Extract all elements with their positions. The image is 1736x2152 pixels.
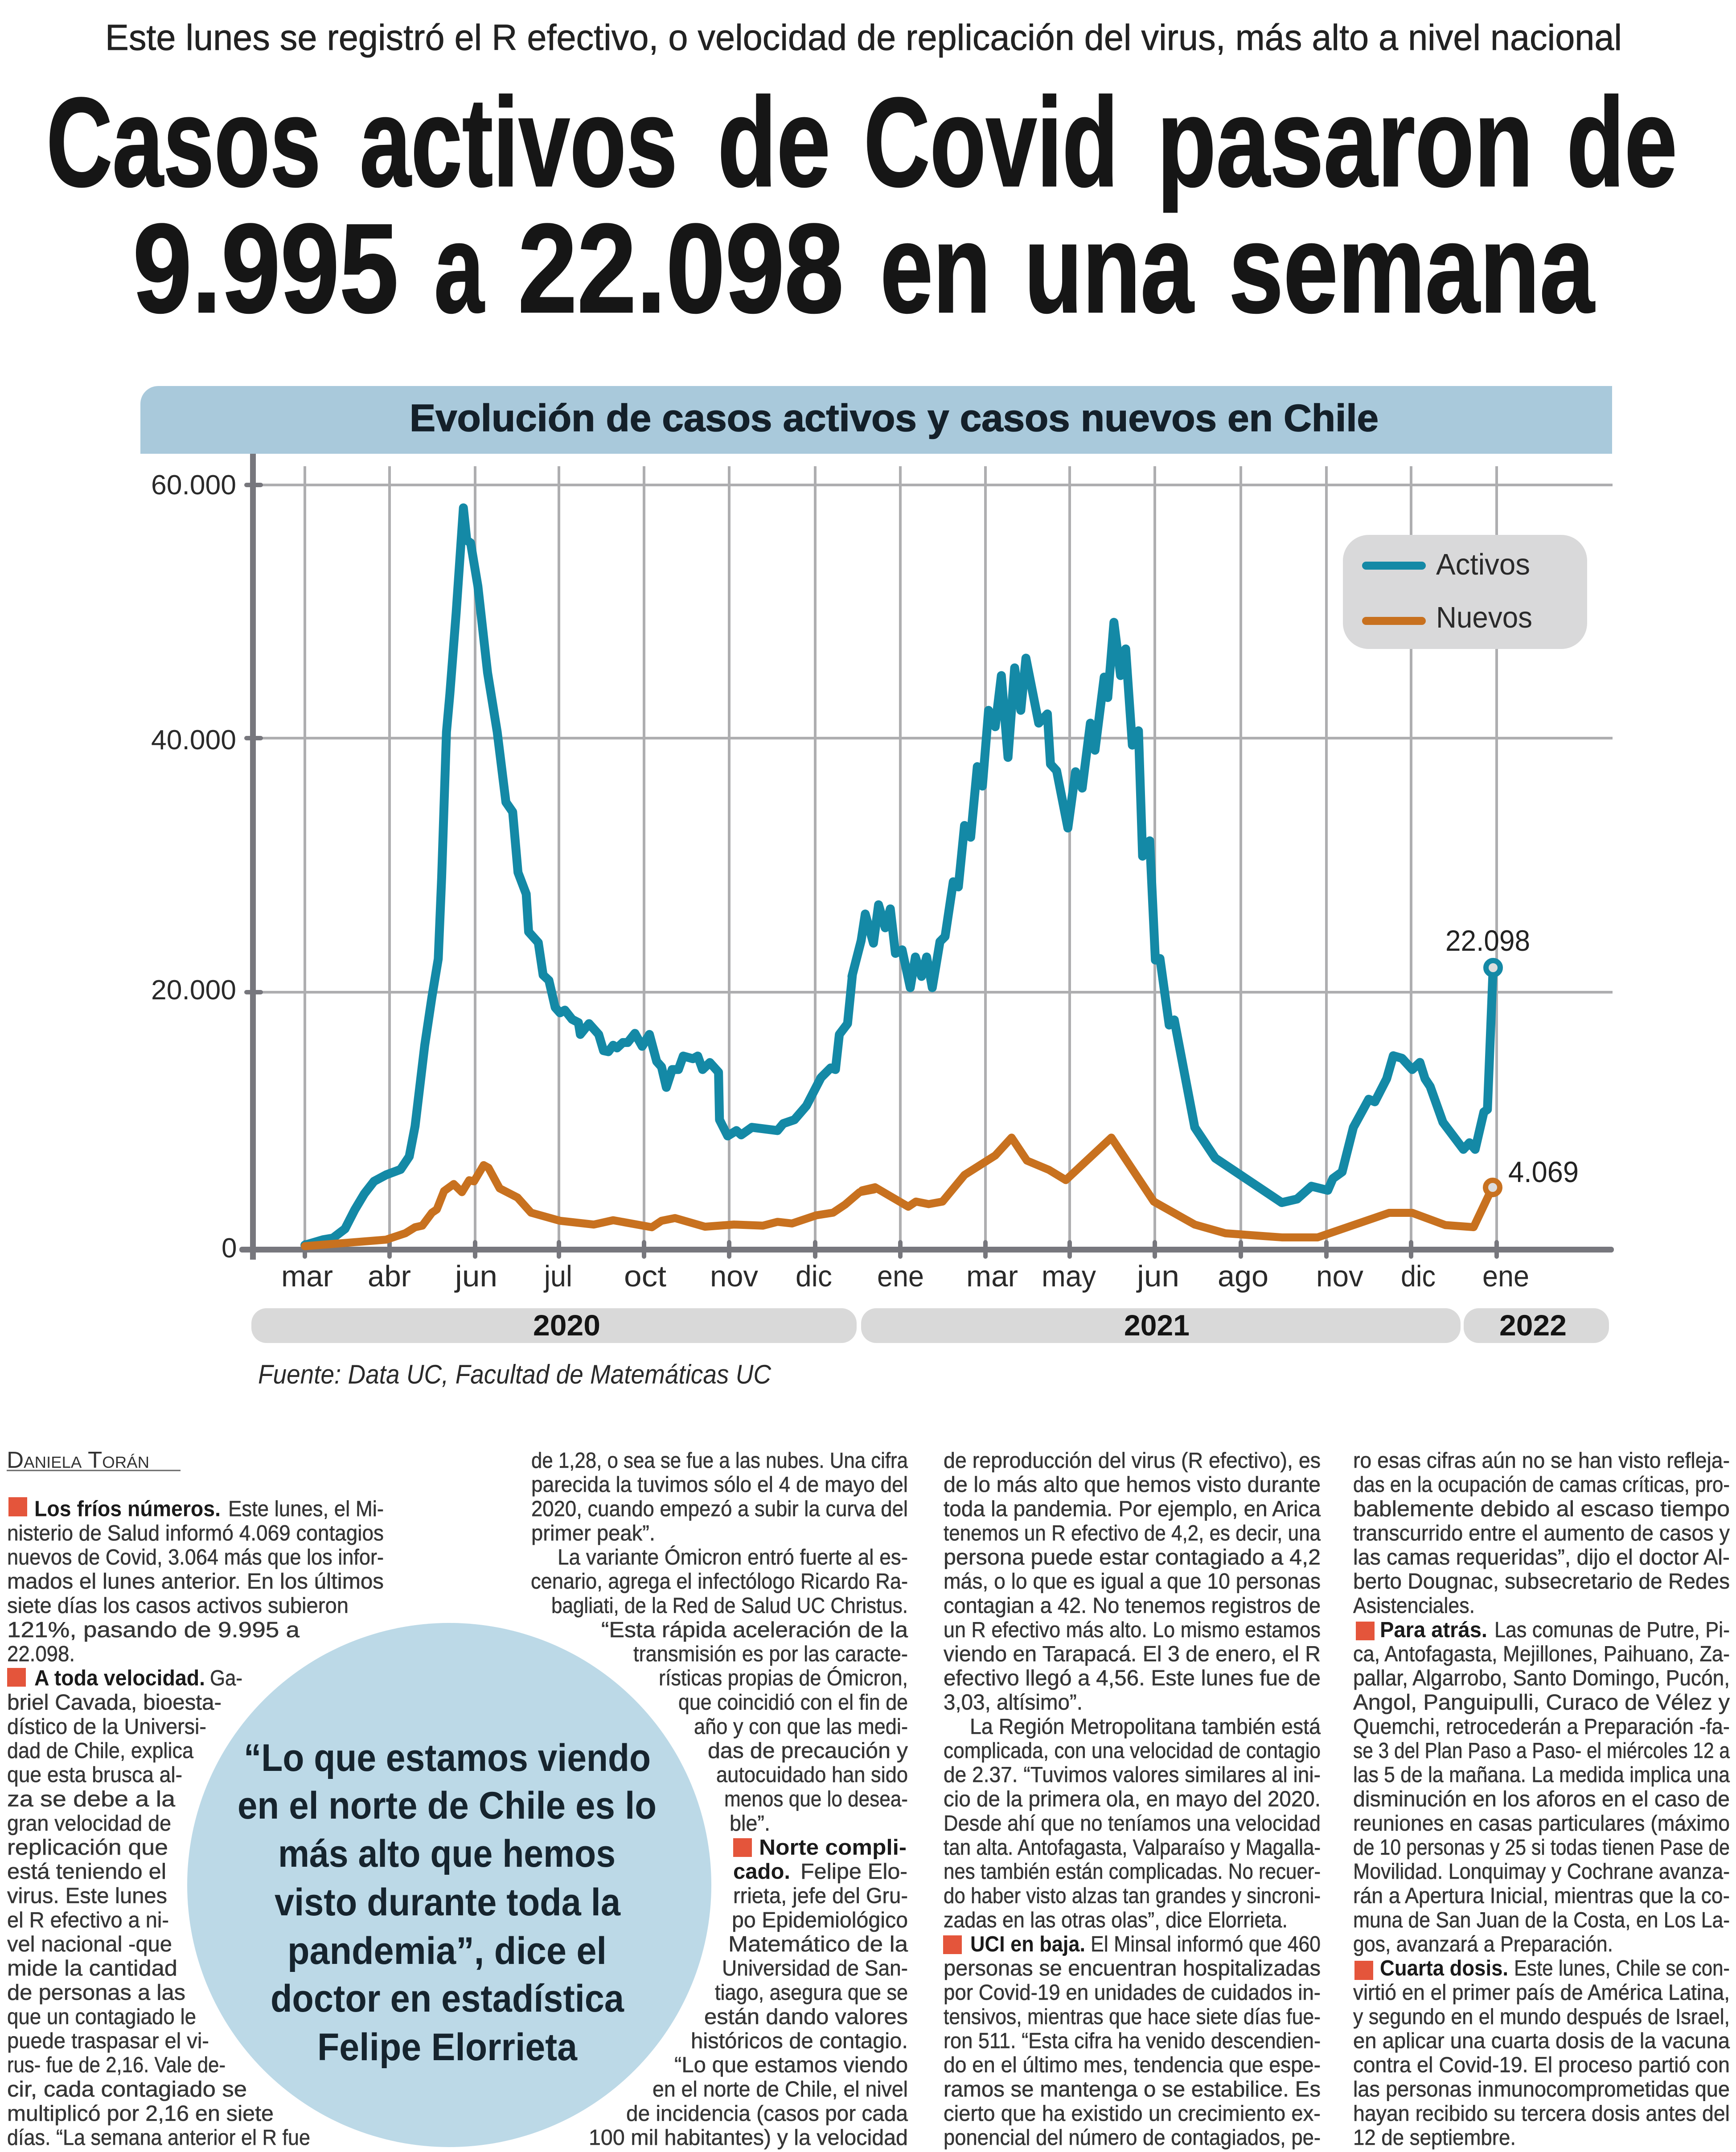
legend: Activos [1436,548,1530,581]
chart panel [140,386,1614,1389]
line: casos activos [305,508,1493,1245]
article column 2: autocuidado han sido [716,1763,908,1787]
article column 1: Ga- [210,1666,242,1690]
article column 4: Angol, Panguipulli, Curaco de Vélez y [1353,1690,1730,1714]
article column 2: de 1,28, o sea se fue a las nubes. Una cifra [531,1449,908,1473]
article column 2: “Lo que estamos viendo [674,2053,908,2077]
marker: activos end point [1486,961,1500,975]
month labels: jun [1136,1260,1179,1293]
article column 3: personas se encuentran hospitalizadas [944,1956,1321,1980]
y axis labels [151,470,237,1264]
article column 2: Felipe Elo- [800,1860,907,1884]
article column 1: dad de Chile, explica [7,1739,194,1763]
article column 3: viendo en Tarapacá. El 3 de enero, el R [944,1642,1321,1666]
article column 1: dístico de la Universi- [7,1715,206,1739]
article column 2: en el norte de Chile, el nivel [653,2077,908,2101]
article column 2: 2020, cuando empezó a subir la curva del [531,1497,908,1521]
article column 2: Matemático de la [728,1932,908,1956]
article column 3: toda la pandemia. Por ejemplo, en Arica [944,1497,1321,1521]
article column 2: menos que lo desea- [724,1787,908,1811]
marker: nuevos end point [1486,1180,1500,1195]
article column 3: complicada, con una velocidad de contagio [944,1739,1321,1763]
article column 1: que un contagiado le [7,2005,196,2029]
month labels: mar [966,1260,1018,1293]
article column 2: históricos de contagio. [691,2029,908,2053]
title: de [718,72,830,213]
y axis labels: 0 [222,1233,237,1264]
title: 9.995 [133,198,398,339]
article column 2: 100 mil habitantes) y la velocidad [589,2126,908,2150]
article column 2: das de precaución y [708,1739,908,1763]
year bands: 2022 [1499,1309,1567,1342]
month labels: nov [1316,1260,1363,1293]
article column 1: días. “La semana anterior el R fue [7,2126,310,2150]
article column 4: las camas requeridas”, dijo el doctor Al- [1353,1545,1730,1569]
article column 3: El Minsal informó que 460 [1091,1932,1321,1956]
article column 3: ponencial del número de contagiados, pe- [944,2126,1321,2150]
article column 1: Este lunes, el Mi- [228,1497,384,1521]
legend: Nuevos [1436,601,1532,634]
article column 2: po Epidemiológico [732,1908,908,1932]
legend [1343,535,1587,649]
callout: pull quote circle: más alto que hemos [278,1832,616,1875]
value label: 4.069: 4.069 [1508,1155,1579,1188]
title: semana [1229,198,1595,339]
article column 3: zadas en las otras olas”, dice Elorrieta. [944,1908,1288,1932]
article column 3: cierto que ha existido un crecimiento ex- [944,2102,1321,2126]
article column 1: briel Cavada, bioesta- [7,1690,222,1714]
article column 1: siete días los casos activos subieron [7,1594,349,1618]
article column 3: de reproducción del virus (R efectivo), es [944,1449,1321,1473]
article column 1: cir, cada contagiado se [7,2077,247,2101]
article column 4: en aplicar una cuarta dosis de la vacuna [1353,2029,1730,2053]
title: a [434,198,484,339]
title: pasaron [1157,72,1533,214]
month labels [281,1260,1529,1293]
callout: pull quote circle: pandemia”, dice el [287,1930,607,1972]
subtitle: Este lunes se registró el R efectivo, o velocidad de replicación del virus, más alto a nivel nacional [105,17,1622,58]
article column 4: gos, avanzará a Preparación. [1353,1932,1613,1956]
month labels: jun [454,1260,497,1293]
source note: Fuente: Data UC, Facultad de Matemáticas UC [258,1359,772,1389]
month labels: dic [796,1260,832,1293]
article column 1: mados el lunes anterior. En los últimos [7,1569,384,1593]
article column 3: de 2.37. “Tuvimos valores similares al ini- [944,1763,1321,1787]
article column 2 [531,1449,908,2150]
title: en [880,198,991,339]
month labels: ene [877,1260,924,1293]
article column 2: de incidencia (casos por cada [626,2102,908,2126]
article column 4: berto Dougnac, subsecretario de Redes [1353,1569,1730,1593]
article column 3: UCI en baja. [970,1932,1085,1956]
year bands: 2021 [1124,1309,1190,1342]
article column 2: ble”. [730,1811,770,1836]
title: de [1567,72,1677,213]
year bands [251,1308,1609,1343]
article column 2: cado. [733,1860,790,1884]
article column 2: “Esta rápida aceleración de la [601,1618,908,1642]
article column 3: do en el último mes, tendencia que espe- [944,2053,1321,2077]
article column 2: Norte compli- [759,1836,907,1860]
article column 1: vel nacional -que [7,1932,172,1956]
article column 2: La variante Ómicron entró fuerte al es- [558,1545,908,1569]
article column 4: las personas inmunocomprometidas que [1353,2077,1730,2101]
month labels: nov [710,1260,758,1293]
month labels: jul [543,1260,572,1293]
month labels: abr [368,1260,411,1293]
article column 1: gran velocidad de [7,1811,171,1836]
article column 1 [7,1497,384,2150]
title: activos [360,72,677,213]
article column 1: replicación que [7,1836,168,1860]
article column 3: contagian a 42. No tenemos registros de [944,1594,1321,1618]
article column 3: cio de la primera ola, en mayo del 2020. [944,1787,1321,1811]
article column 4: Para atrás. [1380,1618,1487,1642]
month labels: ene [1482,1260,1529,1293]
article column 3: 3,03, altísimo”. [944,1690,1083,1714]
article column 2: transmisión es por las caracte- [633,1642,908,1666]
article column 2: Universidad de San- [722,1956,908,1980]
article column 1: multiplicó por 2,16 en siete [7,2102,274,2126]
callout: pull quote circle: “Lo que estamos viendo [244,1737,651,1779]
y axis labels: 60.000 [151,470,236,501]
month labels: may [1042,1260,1096,1293]
byline: Daniela Torán [7,1447,149,1473]
article column 2: que coincidió con el fin de [678,1690,908,1714]
article column 1: de personas a las [7,1981,185,2005]
line: casos nuevos [305,1138,1493,1246]
article column 1: que esta brusca al- [7,1763,182,1787]
article column 2: año y con que las medi- [694,1715,908,1739]
title: 22.098 [518,198,844,339]
callout: pull quote circle: doctor en estadística [271,1977,624,2020]
article column 1: A toda velocidad. [34,1666,205,1690]
title: una [1024,198,1194,339]
article column 1: está teniendo el [7,1860,166,1884]
article column 1: puede traspasar el vi- [7,2029,209,2053]
title: Casos [46,72,321,213]
y axis labels: 20.000 [151,975,236,1006]
article column 3: por Covid-19 en unidades de cuidados in- [944,1981,1321,2005]
chart heading band [140,386,1612,454]
article column 1: nisterio de Salud informó 4.069 contagios [7,1521,384,1545]
year bands: 2020 [533,1309,600,1342]
article column 2: tiago, asegura que se [715,1981,908,2005]
article column 2: rrieta, jefe del Gru- [733,1884,908,1908]
article column 1: 22.098. [7,1642,75,1666]
article column 1: nuevos de Covid, 3.064 más que los infor- [7,1545,384,1569]
month labels: ago [1218,1260,1268,1293]
article column 2: bagliati, de la Red de Salud UC Christus. [551,1594,908,1618]
article column 3: efectivo llegó a 4,56. Este lunes fue de [944,1666,1321,1690]
article column 3: Desde ahí que no teníamos una velocidad [944,1811,1321,1836]
article column 3: tenemos un R efectivo de 4,2, es decir, una [944,1521,1321,1545]
article column 1: 121%, pasando de 9.995 a [7,1618,300,1642]
article column 2: parecida la tuvimos sólo el 4 de mayo del [531,1473,908,1497]
article column 3: un R efectivo más alto. Lo mismo estamos [944,1618,1321,1642]
article column 4: Asistenciales. [1353,1594,1475,1618]
article column 3: do haber visto alzas tan grandes y sincroni- [944,1884,1321,1908]
article column 2: están dando valores [704,2005,908,2029]
article column 3: ron 511. “Esta cifra ha venido descendien- [944,2029,1321,2053]
article column 1: virus. Este lunes [7,1884,167,1908]
callout: pull quote circle: visto durante toda la [275,1881,621,1924]
article column 1: el R efectivo a ni- [7,1908,169,1932]
callout: pull quote circle [187,1623,711,2147]
title: Covid [864,72,1118,213]
article column 1: za se debe a la [7,1787,176,1811]
article column 4: contra el Covid-19. El proceso partió con [1353,2053,1730,2077]
article column 3: tan alta. Antofagasta, Valparaíso y Magalla- [944,1836,1321,1860]
article column 3: nes también están complicadas. No recuer- [944,1860,1321,1884]
article column 4: Cuarta dosis. [1380,1956,1508,1980]
article column 3: persona puede estar contagiado a 4,2 [944,1545,1321,1569]
chart axes and ticks [239,454,1614,1260]
value label: 22.098: 22.098 [1445,924,1530,957]
article column 3: más, o lo que es igual a que 10 personas [944,1569,1321,1593]
article column 4: 12 de septiembre. [1353,2126,1516,2150]
article column 4: disminución en los aforos en el caso de [1353,1787,1730,1811]
article column 2: rísticas propias de Ómicron, [659,1666,908,1690]
month labels: oct [624,1260,666,1293]
article column 3: ramos se mantenga o se estabilice. Es [944,2077,1321,2101]
article column 1: rus- fue de 2,16. Vale de- [7,2053,226,2077]
article column 3: de lo más alto que hemos visto durante [944,1473,1321,1497]
article column 1: mide la cantidad [7,1956,177,1980]
callout: pull quote circle: Felipe Elorrieta [317,2026,578,2069]
month labels: dic [1401,1260,1436,1293]
article column 1: Los fríos números. [34,1497,221,1521]
chart heading band: Evolución de casos activos y casos nuevos en Chile [410,397,1379,439]
grid lines [253,466,1613,1250]
article column 4 [1353,1449,1730,2150]
article column 4: bablemente debido al escaso tiempo [1353,1497,1730,1521]
y axis labels: 40.000 [151,725,236,756]
callout: pull quote circle: en el norte de Chile es lo [238,1784,657,1827]
article column 2: primer peak”. [531,1521,655,1545]
article column 2: cenario, agrega el infectólogo Ricardo Ra- [531,1569,908,1593]
title [46,72,1677,339]
month labels: mar [281,1260,333,1293]
article column 3: tensivos, mientras que hace siete días fue- [944,2005,1321,2029]
article column 3 [943,1449,1321,2150]
article column 3: La Región Metropolitana también está [970,1715,1321,1739]
